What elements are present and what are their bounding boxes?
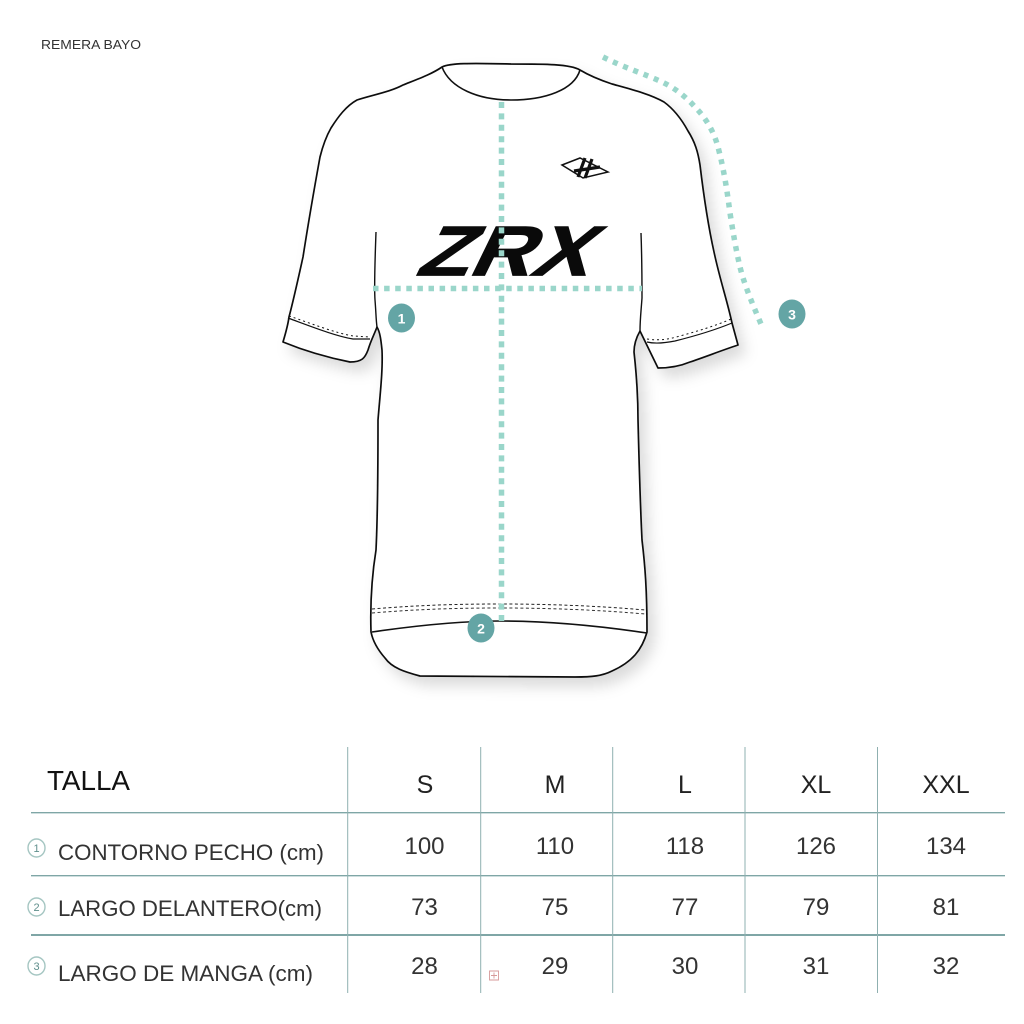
row 2: front length: LARGO DELANTERO(cm) xyxy=(58,896,322,921)
row 3: sleeve length: 29 xyxy=(542,953,568,980)
measure line 1: chest xyxy=(373,286,642,291)
row 2: front length: 77 xyxy=(672,894,698,921)
size table xyxy=(28,747,1005,993)
row 1: chest: 118 xyxy=(666,833,704,860)
marker 1: 1 xyxy=(398,310,406,326)
chest logo icon xyxy=(562,158,608,178)
row 2: front length xyxy=(28,894,959,921)
row 2: front length: 75 xyxy=(542,894,568,921)
row 2: front length: 81 xyxy=(933,894,959,921)
neck collar xyxy=(442,67,580,100)
row 1: chest: 110 xyxy=(536,833,574,860)
header row: TALLA xyxy=(47,765,130,796)
left armhole line xyxy=(375,232,377,327)
ZRX wordmark: ZRX xyxy=(407,211,617,291)
row 1: chest: CONTORNO PECHO (cm) xyxy=(58,840,324,865)
row 1: chest: 134 xyxy=(926,833,966,860)
row 2: front length: 79 xyxy=(803,894,829,921)
marker 3 xyxy=(778,300,806,328)
marker 2: 2 xyxy=(477,620,485,636)
table grid xyxy=(31,747,1005,993)
marker 3: 3 xyxy=(788,306,796,322)
marker 1 xyxy=(388,304,415,332)
row 1: chest: 100 xyxy=(404,833,445,860)
header row: M xyxy=(545,771,565,799)
row 3: sleeve length: 32 xyxy=(933,953,959,980)
measure line 2: front length xyxy=(499,102,504,622)
header row: L xyxy=(678,771,692,799)
row 1: chest: 126 xyxy=(796,833,836,860)
row 1: chest xyxy=(28,833,966,865)
hem stitching xyxy=(372,604,645,610)
row 3: sleeve length: 30 xyxy=(672,953,698,980)
row 2: front length: 73 xyxy=(411,894,438,921)
header row: S xyxy=(417,771,433,799)
shirt outline xyxy=(283,63,738,677)
measure line 3: sleeve xyxy=(603,57,761,324)
t-shirt drawing xyxy=(283,63,738,677)
row 1: chest: 1 xyxy=(33,843,40,855)
right armhole line xyxy=(640,233,642,331)
row 3: sleeve length: 31 xyxy=(803,953,829,980)
title: REMERA BAYO xyxy=(41,38,141,52)
row 3: sleeve length: LARGO DE MANGA (cm) xyxy=(58,961,313,986)
right cuff seam xyxy=(647,323,732,343)
row 2: front length: 2 xyxy=(33,902,40,914)
left cuff seam xyxy=(288,318,370,339)
header row: XL xyxy=(801,771,831,799)
marker 2 xyxy=(468,614,494,642)
header row: XXL xyxy=(922,771,970,799)
row 3: sleeve length xyxy=(28,953,959,986)
row 3: sleeve length: 3 xyxy=(33,961,40,973)
hem line xyxy=(372,621,647,633)
row 3: sleeve length: 28 xyxy=(411,953,438,980)
header row xyxy=(47,765,970,799)
small red marker icon xyxy=(490,971,498,980)
